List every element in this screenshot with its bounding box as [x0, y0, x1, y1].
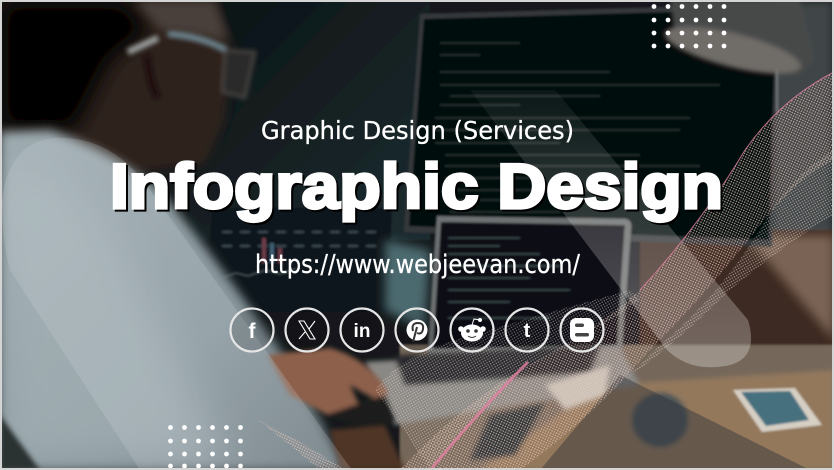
shirt	[0, 130, 345, 470]
left chart monitor	[206, 208, 392, 312]
website url: https://www.webjeevan.com/	[255, 250, 580, 280]
phone	[733, 388, 822, 432]
notebook	[545, 365, 610, 410]
icon: reddit	[450, 308, 494, 352]
sleeve on table	[330, 425, 405, 470]
icon: facebook	[230, 308, 274, 352]
external keyboard	[470, 403, 545, 460]
lighter wood at right	[745, 235, 834, 340]
lamp	[661, 0, 815, 112]
social icons row	[230, 308, 604, 352]
dark wood desk band	[640, 230, 834, 360]
right wall	[770, 0, 834, 250]
icon: linkedin	[340, 308, 384, 352]
hand on keyboard	[268, 348, 395, 430]
ribbon: centre capsule	[470, 90, 751, 367]
dotted wave	[258, 72, 834, 470]
subtitle: Graphic Design (Services)	[261, 116, 574, 145]
dark room wall	[190, 0, 430, 240]
icon: facebook: f	[248, 320, 256, 343]
icon: x	[286, 308, 328, 352]
code lines	[435, 43, 720, 212]
dots: bottom left	[168, 425, 243, 468]
warm tan table	[480, 370, 834, 470]
icon: linkedin: in	[354, 321, 370, 342]
title: Infographic Design	[112, 154, 725, 224]
icon: blogger	[560, 308, 604, 352]
blurred teal gap	[385, 240, 430, 330]
desk surface	[400, 345, 834, 470]
icon: tumblr	[506, 308, 548, 352]
main code monitor	[404, 4, 780, 247]
dots: top right	[652, 4, 726, 48]
shirt highlights	[0, 167, 230, 465]
ribbon: left shirt capsule	[2, 138, 352, 470]
title: Infographic Design	[110, 152, 723, 222]
keyboard keys	[395, 345, 600, 385]
dark bottom-left corner	[0, 415, 40, 470]
head and hair	[0, 0, 232, 175]
ribbon: bottom triangle	[540, 375, 810, 470]
mouse	[632, 393, 688, 447]
laptop keyboard base	[365, 347, 640, 425]
laptop	[428, 216, 631, 355]
icon: pinterest	[396, 308, 438, 352]
translucent ribbon shapes	[2, 90, 810, 470]
glasses	[128, 34, 255, 98]
icon: tumblr: t	[524, 320, 531, 342]
